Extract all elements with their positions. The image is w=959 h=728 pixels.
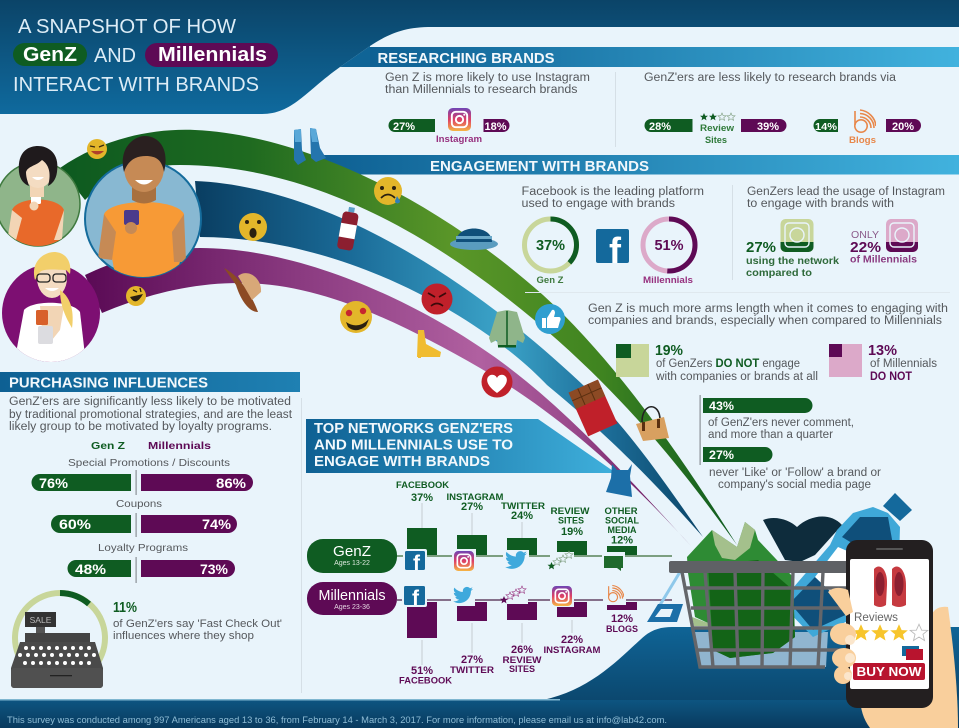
purchasing bar chart: Gen Z	[91, 440, 126, 452]
column: Facebook 51%	[399, 602, 453, 686]
GenZ pill: GenZ	[23, 44, 77, 66]
pill: Millennials: Ages 23-36	[334, 604, 370, 611]
section header: engagement with brands	[320, 155, 959, 175]
bar: loyalty Gen Z	[68, 560, 131, 577]
emoji: wink	[87, 139, 107, 159]
icon: facebook	[596, 229, 629, 271]
purple arc	[85, 248, 692, 547]
column: Facebook 51%: FACEBOOK	[399, 676, 453, 686]
icon: blogs	[855, 110, 876, 132]
emoji: heart eyes	[340, 301, 372, 333]
engagement: instagram usage: ONLY	[851, 230, 879, 241]
engagement: comment and like stats: never 'Like' or 'Follow' a brand or	[709, 467, 881, 479]
person: Millennial woman	[2, 252, 100, 364]
engagement: arms length: DO NOT	[870, 371, 912, 383]
researching: instagram comparison: than Millennials to research brands	[385, 84, 578, 96]
engagement: instagram usage: 27%	[746, 239, 776, 256]
section header: top networks: AND MILLENNIALS USE TO	[314, 438, 513, 454]
emoji: surprised	[239, 213, 267, 241]
phone: Reviews	[854, 612, 898, 624]
icon: blue heels	[294, 128, 326, 165]
engagement: instagram usage: compared to	[746, 267, 812, 279]
icon: thumbs up	[535, 304, 565, 334]
donut: Millennials 51%	[643, 219, 695, 271]
researching: review sites and blogs: Sites	[705, 135, 727, 146]
column: Twitter 24%: TWITTER	[501, 501, 546, 511]
title: AND	[94, 45, 136, 67]
bar: Millennials 39%: 39%	[757, 121, 779, 133]
icon: blue hat	[450, 228, 498, 250]
bar: coupons Millennials: 74%	[202, 516, 232, 532]
icon: credit cards	[902, 646, 923, 660]
icon: chat	[602, 552, 625, 572]
GenZ pill	[13, 43, 87, 66]
column: Twitter 27%: 27%	[461, 654, 483, 666]
thumb and fingers	[828, 588, 856, 684]
cash register with fast check out ring	[11, 593, 105, 688]
researching: review sites and blogs: GenZ'ers are less likely to research brands via	[644, 72, 897, 84]
engagement: arms length: Gen Z is much more arms length when it comes to engaging with	[588, 303, 948, 315]
engagement: arms length: of GenZers DO NOT engage	[656, 358, 800, 370]
engagement: facebook donuts: Gen Z	[537, 275, 564, 286]
bar: loyalty Millennials	[141, 560, 235, 577]
cash register with fast check out ring: SALE	[30, 615, 52, 625]
pill: Millennials	[307, 582, 397, 615]
section header: top networks: ENGAGE WITH BRANDS	[314, 454, 490, 470]
icon: facebook: f	[413, 552, 421, 575]
purchasing influences text: GenZ'ers are significantly less likely to be motivated	[9, 396, 291, 408]
item: water bottle	[780, 493, 912, 637]
column: Instagram 27%: 27%	[461, 501, 483, 513]
icon: dress	[606, 464, 632, 497]
pill: Millennials: Millennials	[318, 587, 386, 604]
pill: GenZ: Ages 13-22	[334, 560, 370, 567]
engagement: comment and like stats	[700, 395, 881, 491]
icon: jacket	[489, 310, 525, 348]
column: Review sites 26%: REVIEW	[502, 655, 542, 665]
icon: yellow heels	[417, 330, 441, 358]
bar: 43%	[703, 398, 812, 413]
engagement: comment and like stats: of GenZ'ers never comment,	[708, 417, 854, 429]
column: Other social media 12%: 12%	[611, 534, 633, 546]
column: Twitter 24%: 24%	[511, 510, 533, 522]
engagement: comment and like stats: and more than a quarter	[708, 429, 833, 441]
title: INTERACT WITH BRANDS	[13, 74, 259, 96]
fast check out stat: 11%	[113, 599, 137, 616]
column: Twitter 27%: TWITTER	[450, 665, 495, 675]
icon: heart	[482, 366, 512, 398]
bar: Millennials 18%: 18%	[484, 121, 507, 133]
column: Other social media 12%: OTHER	[604, 506, 638, 516]
icon: hand holding phone	[828, 540, 958, 728]
bar: Millennials 39%	[741, 119, 787, 133]
section header: researching brands	[340, 46, 959, 67]
rating stars	[852, 624, 928, 640]
column: Review sites 19%: 19%	[561, 526, 583, 538]
emoji: angry	[422, 284, 452, 314]
engagement: arms length: of Millennials	[870, 358, 937, 370]
engagement: arms length: with companies or brands at all	[655, 371, 818, 383]
column: Facebook 37%: FACEBOOK	[396, 480, 450, 490]
icon: facebook: f	[609, 230, 622, 271]
footer band	[0, 699, 959, 728]
column: Instagram 27%: INSTAGRAM	[446, 492, 504, 502]
section header: top networks: TOP NETWORKS GENZ'ERS	[314, 421, 513, 437]
icon: instagram	[550, 584, 574, 607]
section header: researching brands: RESEARCHING BRANDS	[378, 51, 555, 67]
icon: red shoes	[874, 566, 906, 607]
column: Instagram 27%	[446, 492, 504, 555]
engagement: facebook donuts: Facebook is the leading platform	[522, 186, 704, 198]
engagement: instagram usage: using the network	[746, 255, 839, 267]
column: Twitter 24%	[501, 501, 546, 555]
icon: instagram	[452, 549, 476, 572]
icon: instagram Gen Z	[780, 219, 814, 252]
column: Review sites 26%: 26%	[511, 644, 533, 656]
column: Blogs 12%	[606, 602, 638, 634]
blue arc	[195, 181, 703, 537]
bar: 27%	[703, 447, 773, 462]
icon: rating stars	[700, 113, 735, 120]
pill: GenZ	[307, 539, 397, 573]
icon: facebook	[402, 584, 427, 610]
bar: Millennials 20%: 20%	[892, 121, 914, 133]
column: Other social media 12%: SOCIAL	[605, 516, 639, 526]
engagement: instagram usage: to engage with brands with	[747, 198, 894, 210]
researching: review sites and blogs: Review	[700, 123, 735, 134]
engagement: arms length: companies and brands, especially when compared to Millennials	[588, 315, 942, 327]
engagement: instagram usage: of Millennials	[850, 254, 917, 266]
shopping basket with goods	[669, 493, 912, 667]
icon: instagram Millennials	[886, 219, 918, 252]
researching: instagram comparison: Instagram	[436, 134, 482, 145]
section header: top networks	[306, 419, 616, 473]
icon: twitter	[451, 586, 475, 606]
title	[13, 16, 278, 96]
engagement: facebook donuts: used to engage with brands	[522, 198, 675, 210]
item: hat	[763, 517, 842, 562]
fast check out stat: of GenZ'ers say 'Fast Check Out'	[113, 618, 282, 630]
bar: Gen Z 27%	[389, 119, 435, 133]
donut: Gen Z 37%	[524, 219, 576, 271]
engagement: instagram usage: GenZers lead the usage of Instagram	[747, 186, 945, 198]
person: Gen Z woman	[0, 146, 80, 246]
engagement: comment and like stats: company's social media page	[718, 479, 871, 491]
engagement: arms length: 13%	[868, 342, 897, 359]
engagement: arms length	[588, 303, 948, 383]
bar: Gen Z 28%: 28%	[649, 121, 671, 133]
bar: special promotions Millennials	[141, 474, 253, 491]
icon: twitter	[503, 550, 529, 571]
column: Facebook 51%: 51%	[411, 665, 433, 677]
section header: engagement with brands: ENGAGEMENT WITH BRANDS	[430, 159, 649, 175]
bar: loyalty Gen Z: 48%	[75, 561, 107, 577]
column: Facebook 37%: 37%	[411, 492, 433, 504]
column: Instagram 22%: INSTAGRAM	[544, 645, 600, 655]
column: Twitter 27%	[450, 602, 495, 675]
person: Gen Z man	[85, 136, 201, 280]
column: Review sites 19%: REVIEW	[550, 506, 590, 516]
engagement: instagram usage: 22%	[850, 239, 881, 256]
column: Other social media 12%	[604, 506, 639, 555]
donut: Gen Z 37%: 37%	[536, 238, 565, 254]
bar: special promotions Millennials: 86%	[216, 475, 247, 491]
section header: purchasing influences: PURCHASING INFLUENCES	[9, 376, 208, 392]
pill: GenZ: GenZ	[333, 543, 371, 560]
bar: loyalty Millennials: 73%	[200, 561, 229, 577]
item: green bag	[687, 522, 795, 658]
icon: basket handle	[647, 567, 683, 622]
icon: instagram	[448, 108, 471, 131]
network chart: Gen Z row	[307, 480, 672, 575]
bar: coupons Gen Z	[51, 515, 131, 533]
bar: coupons Millennials	[141, 515, 237, 533]
emoji: laughing	[126, 286, 146, 306]
engagement: arms length: 19%	[655, 342, 683, 359]
header banner	[0, 0, 959, 114]
bottom right wave	[543, 627, 959, 728]
column: Instagram 22%	[544, 602, 600, 655]
donut: Millennials 51%: 51%	[654, 238, 684, 254]
column: Facebook 37%	[396, 480, 450, 555]
phone	[846, 540, 933, 708]
researching: review sites and blogs: Blogs	[849, 135, 876, 146]
researching: instagram comparison: Gen Z is more likely to use Instagram	[385, 72, 590, 84]
buy now button: BUY NOW	[856, 664, 922, 679]
purchasing bar chart: Special Promotions / Discounts	[68, 457, 230, 469]
bar: 43%: 43%	[709, 401, 734, 413]
engagement: facebook donuts: Millennials	[643, 275, 693, 286]
basket frame	[682, 572, 846, 667]
icon: review stars	[548, 551, 574, 570]
column: Review sites 19%: SITES	[558, 516, 584, 526]
purchasing bar chart	[32, 440, 253, 583]
purchasing influences text	[9, 396, 293, 433]
bar: Gen Z 27%: 27%	[393, 121, 415, 133]
column: Review sites 19%	[550, 506, 590, 555]
fast check out stat	[113, 599, 282, 642]
square: Gen Z 19%	[616, 344, 649, 377]
purchasing influences text: likely group to be motivated by loyalty programs.	[9, 421, 272, 433]
emoji: sad	[374, 177, 402, 205]
column: Blogs 12%: 12%	[611, 613, 633, 625]
bar: Gen Z 28%	[644, 119, 692, 133]
column: Review sites 26%	[502, 602, 542, 674]
network chart: Millennials row	[307, 582, 672, 686]
icon: handbag	[636, 407, 669, 441]
purchasing bar chart: Coupons	[116, 498, 162, 510]
icon: facebook	[403, 549, 427, 575]
icon: review stars	[500, 586, 528, 604]
purchasing bar chart: Millennials	[148, 440, 211, 452]
researching: review sites and blogs	[615, 72, 921, 147]
icon: red bottle	[337, 206, 360, 251]
engagement: instagram usage	[732, 185, 945, 280]
title: A SNAPSHOT OF HOW	[18, 16, 236, 38]
square: Millennials 13%	[829, 344, 862, 377]
footer band: This survey was conducted among 997 Americans aged 13 to 36, from February 14 - March 3, 2017. For more information, please email us at info@lab42.com.	[7, 715, 667, 726]
bar: special promotions Gen Z	[32, 474, 131, 491]
bar: Gen Z 14%: 14%	[815, 121, 838, 133]
green arc	[60, 130, 737, 545]
bar: 27%: 27%	[709, 450, 734, 462]
purchasing influences text: by traditional promotional strategies, and are the least	[9, 409, 293, 421]
bar: Millennials 20%	[886, 119, 921, 133]
column: Other social media 12%: MEDIA	[608, 525, 637, 535]
purchasing bar chart: Loyalty Programs	[98, 542, 188, 554]
bar: coupons Gen Z: 60%	[59, 516, 92, 532]
researching: instagram comparison	[385, 72, 590, 145]
icon: tan hat	[224, 268, 261, 312]
section header: purchasing influences	[0, 372, 300, 392]
column: Instagram 22%: 22%	[561, 634, 583, 646]
Millennials pill: Millennials	[158, 44, 267, 66]
column: Review sites 26%: SITES	[509, 664, 535, 674]
engagement: facebook donuts	[522, 186, 704, 286]
column: Blogs 12%: BLOGS	[606, 624, 638, 634]
icon: facebook: f	[412, 587, 420, 610]
icon: blogs	[603, 583, 626, 605]
fast check out stat: influences where they shop	[113, 630, 254, 642]
bar: special promotions Gen Z: 76%	[39, 475, 69, 491]
icon: chocolate	[569, 380, 617, 436]
